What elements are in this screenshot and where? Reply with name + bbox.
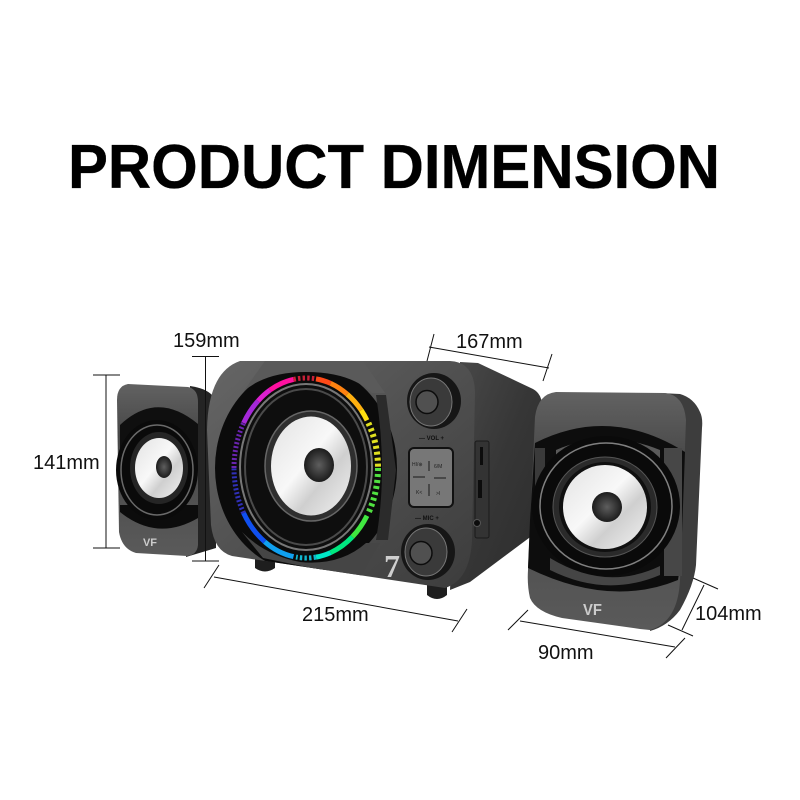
dimension: 104mm (668, 578, 762, 636)
volume knob (407, 373, 461, 429)
button panel: HI/⊕ (412, 462, 423, 468)
left satellite speaker (116, 384, 216, 557)
dimension: 159mm (173, 330, 240, 561)
logo: VF: VF (583, 602, 602, 619)
dimension: 141mm (33, 375, 120, 548)
dimension: 141mm: 141mm (33, 452, 100, 474)
foot: left (255, 558, 275, 572)
mic knob (401, 524, 455, 580)
MIC label: — MIC + (415, 516, 439, 522)
dimension: 167mm (427, 331, 552, 381)
VOL label: — VOL + (419, 436, 445, 442)
dimension: 159mm: 159mm (173, 330, 240, 352)
dimension: 104mm: 104mm (695, 603, 762, 625)
dimension: 90mm (508, 610, 685, 664)
dimension: 167mm: 167mm (456, 331, 523, 353)
right satellite speaker (528, 392, 702, 631)
button panel: 6/M (434, 464, 442, 470)
button panel (409, 448, 453, 507)
button panel: >I (436, 491, 440, 497)
woofer cone (271, 416, 351, 516)
logo: VF: VF (143, 537, 157, 549)
speaker bay (215, 361, 397, 578)
foot: right (427, 584, 447, 599)
ports (474, 441, 489, 538)
RGB light ring (234, 378, 378, 558)
button panel: K< (416, 490, 422, 496)
dimension: 90mm: 90mm (538, 642, 594, 664)
dimension: 215mm (204, 565, 467, 632)
logo: 7: 7 (384, 548, 400, 584)
dimension: 215mm: 215mm (302, 604, 369, 626)
main subwoofer unit (207, 361, 542, 599)
title: PRODUCT DIMENSION (68, 133, 720, 202)
